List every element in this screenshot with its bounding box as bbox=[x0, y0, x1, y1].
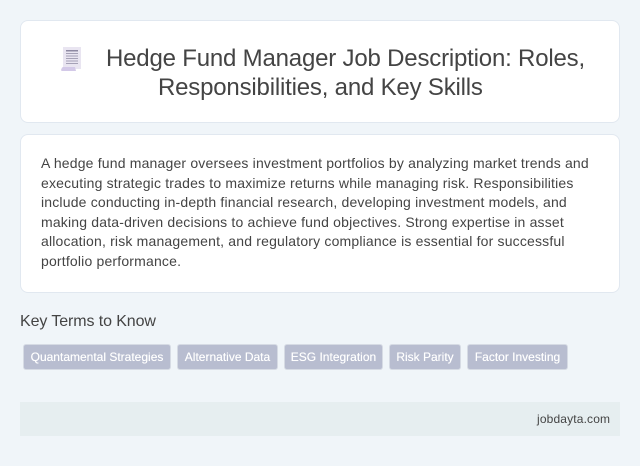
description text: A hedge fund manager oversees investment portfolios by analyzing market trends and bbox=[41, 155, 589, 171]
tag: Factor Investing bbox=[467, 344, 568, 370]
description text: executing strategic trades to maximize returns while managing risk. Responsibilities bbox=[41, 175, 574, 191]
tag: Quantamental Strategies bbox=[23, 344, 171, 370]
icon: document scroll bbox=[61, 47, 81, 71]
panel: description card bbox=[20, 134, 620, 293]
title line 1: Hedge Fund Manager Job Description: Roles, bbox=[106, 45, 585, 72]
description text: allocation, risk management, and regulatory compliance is essential for successful bbox=[41, 233, 565, 249]
description text: portfolio performance. bbox=[41, 253, 181, 269]
panel: title card bbox=[20, 20, 620, 123]
tag: ESG Integration: ESG Integration bbox=[291, 350, 376, 364]
heading: key terms: Key Terms to Know bbox=[20, 313, 156, 330]
tag: Alternative Data bbox=[177, 344, 278, 370]
description text: include conducting in-depth financial research, developing investment models, and bbox=[41, 194, 567, 210]
title line 2: Responsibilities, and Key Skills bbox=[158, 74, 483, 101]
tag: Risk Parity bbox=[389, 344, 461, 370]
tag: Quantamental Strategies: Quantamental Strategies bbox=[31, 350, 163, 364]
description text: making data-driven decisions to achieve fund objectives. Strong expertise in asset bbox=[41, 214, 564, 230]
footer bar bbox=[20, 402, 620, 436]
tag: ESG Integration bbox=[284, 344, 383, 370]
footer: site name: jobdayta.com bbox=[537, 412, 610, 426]
tag: Risk Parity: Risk Parity bbox=[396, 350, 454, 364]
description text bbox=[41, 155, 589, 269]
tag: Alternative Data: Alternative Data bbox=[185, 350, 270, 364]
tag: Factor Investing: Factor Investing bbox=[475, 350, 560, 364]
